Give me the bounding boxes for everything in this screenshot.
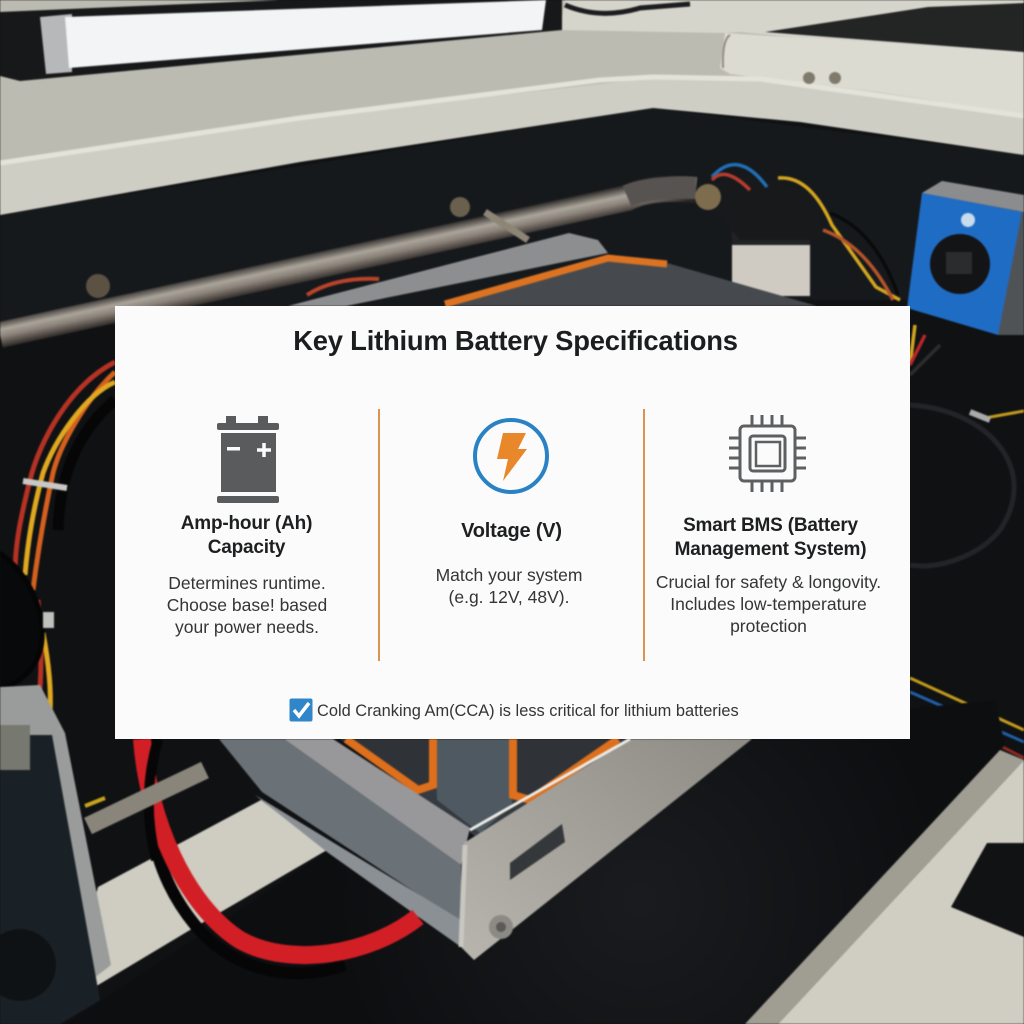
description: smart BMS: Crucial for safety & longovity. [656, 572, 881, 592]
heading: voltage: Voltage (V) [461, 520, 562, 542]
description: smart BMS: Includes low-temperature [670, 594, 867, 614]
right cables [910, 405, 1024, 758]
description: amp-hour capacity: Determines runtime. [168, 573, 326, 593]
top wires [712, 165, 940, 375]
red battery cable [142, 739, 418, 973]
top ledge [0, 0, 1024, 215]
description: voltage: Match your system [436, 565, 582, 585]
description: amp-hour capacity: your power needs. [175, 617, 319, 637]
heading: smart BMS: Management System) [675, 539, 866, 560]
battery top [288, 233, 817, 306]
heading: amp-hour capacity [181, 513, 312, 558]
heading: smart BMS: Smart BMS (Battery [683, 515, 858, 536]
black floor mat [65, 700, 1005, 1024]
icon: checkbox [290, 698, 312, 722]
panel: key specifications card [115, 306, 910, 739]
fuel filter [695, 172, 822, 296]
heading: smart BMS [675, 515, 866, 560]
left wire bundle [0, 362, 115, 713]
description: amp-hour capacity: Choose base! based [167, 595, 327, 615]
description: voltage [436, 565, 582, 607]
blue switch box [907, 181, 1024, 335]
description: smart BMS [656, 572, 881, 636]
latch bottom right [951, 843, 1024, 937]
rod, lower left [88, 770, 205, 826]
engine bracket, lower left [0, 685, 111, 1024]
cream floor, bottom right [778, 760, 1024, 1024]
title: Key Lithium Battery Specifications [293, 325, 738, 356]
description: amp-hour capacity [167, 573, 327, 637]
icon: battery [217, 416, 279, 503]
yellow wire, lower left [85, 798, 105, 806]
divider line 1 [378, 409, 380, 661]
LED light bar [0, 0, 562, 81]
divider line 2 [643, 409, 645, 661]
metal battery tray [219, 739, 752, 960]
red wires behind pipe [307, 279, 379, 295]
footer text: Cold Cranking Am(CCA) is less critical for lithium batteries [317, 702, 739, 720]
icon: microchip [729, 415, 806, 492]
mounting bolts [803, 72, 815, 84]
icon: lightning bolt in circle [473, 418, 549, 494]
heading: amp-hour capacity: Amp-hour (Ah) [181, 513, 312, 534]
heading: amp-hour capacity: Capacity [208, 537, 285, 558]
description: voltage: (e.g. 12V, 48V). [449, 587, 569, 607]
column: voltage [436, 418, 582, 607]
cream floor, bottom left [68, 800, 327, 1003]
footer note with checkbox [290, 698, 739, 722]
column: smart BMS [656, 415, 881, 636]
description: smart BMS: protection [730, 616, 807, 636]
column: amp-hour capacity [167, 416, 327, 637]
metal pipe with clamps [0, 188, 696, 335]
